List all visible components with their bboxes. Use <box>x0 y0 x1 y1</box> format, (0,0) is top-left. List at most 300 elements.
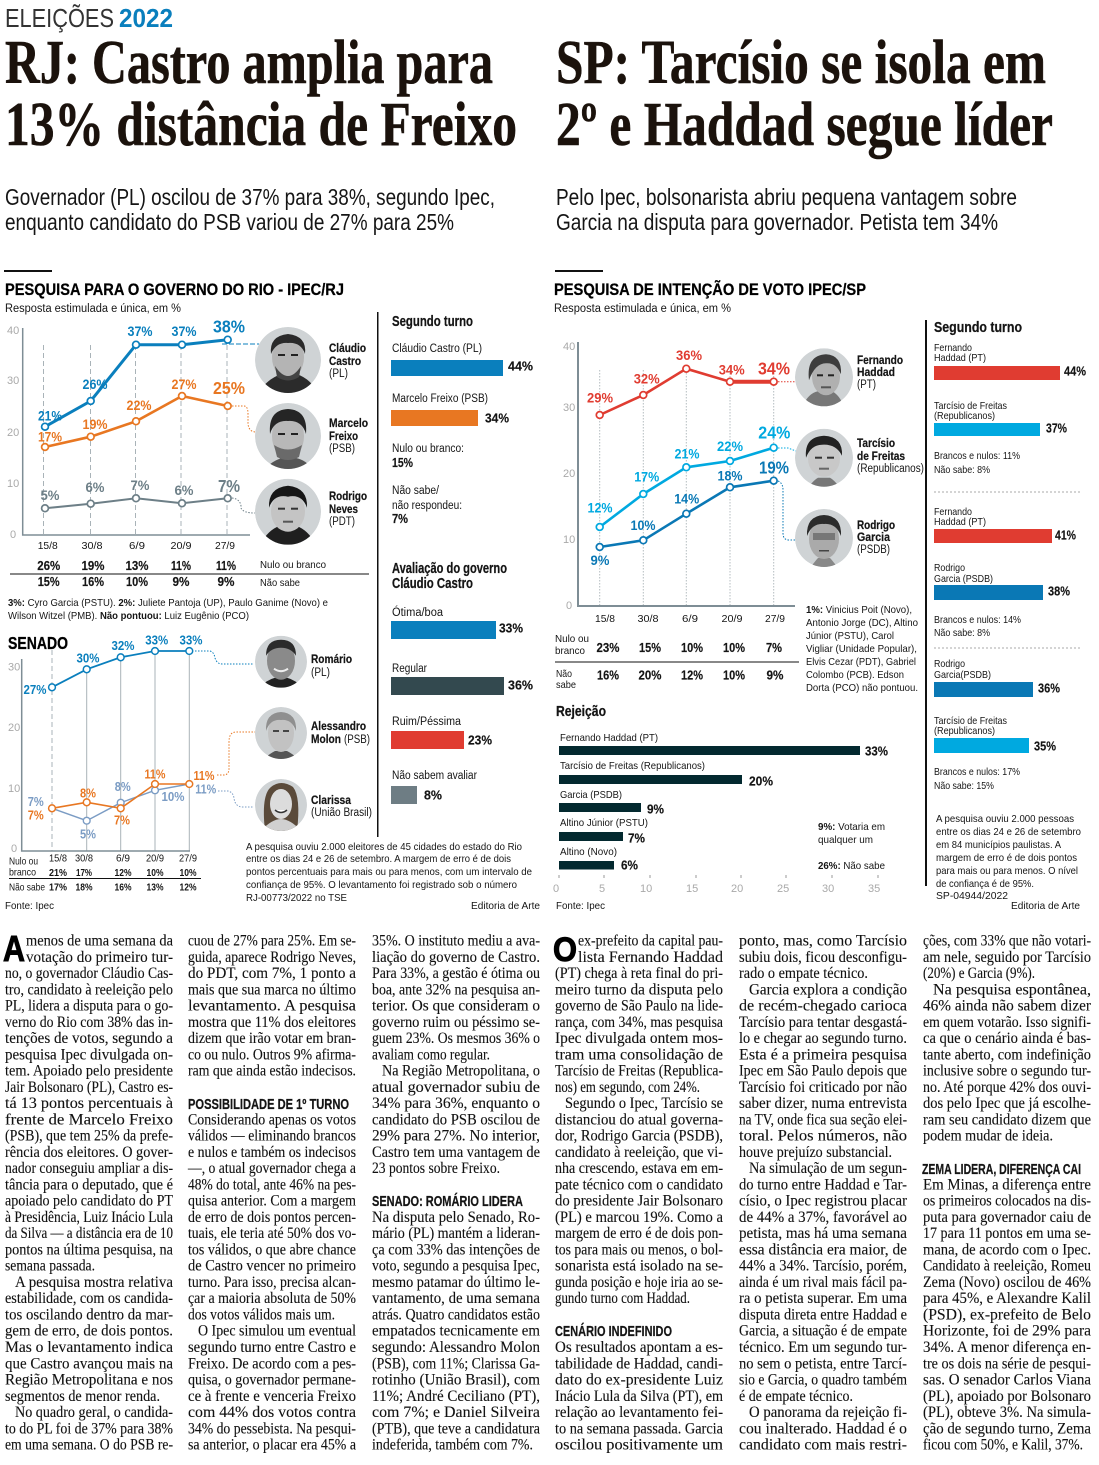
matchup: Garcia x Tarcísio: 36% <box>1038 682 1060 696</box>
x axis dates: 6/9 <box>129 540 145 552</box>
series: Clarissa <box>28 780 216 842</box>
article column 2: mais que sua marca no último <box>188 981 356 998</box>
article column 4: lista Fernando Haddad <box>578 949 723 966</box>
article column 3: 35%. O instituto mediu a ava- <box>372 932 540 950</box>
table: nulo e não sabe, Senado: 21% <box>49 867 68 879</box>
name: Cláudio Castro: Cláudio <box>329 343 366 355</box>
bar chart: rejeição: Altino (Novo) <box>560 846 617 858</box>
rejeição notes <box>818 821 885 872</box>
article column 1: gem de erro, de dois pontos. <box>5 1323 173 1340</box>
article column 4: ex-prefeito da capital pau- <box>578 932 723 950</box>
line chart: governo de SP <box>563 341 796 625</box>
article column 3: boa, ante 32% na pesquisa an- <box>372 981 540 998</box>
matchup: Haddad x Garcia: Haddad (PT) <box>934 516 986 528</box>
article column 4 <box>553 931 723 1454</box>
article column 3: candidato do PSB oscilou de <box>372 1111 540 1128</box>
article column 4: sonarista está isolado na se- <box>555 1258 723 1275</box>
article column 3: 29% para 27%. No interior, <box>372 1128 540 1145</box>
headline: Rio de Janeiro <box>5 29 517 159</box>
article column 5: ra o petista superar. Em uma <box>739 1290 907 1307</box>
article column 5: na TV, onde fica sua seção elei- <box>739 1111 907 1128</box>
article column 5: candidato com mais restri- <box>739 1437 907 1454</box>
article column 3: atrás. Quatro candidatos estão <box>372 1306 540 1324</box>
article column 2: çar a maioria absoluta de 50% <box>188 1290 356 1307</box>
article column 3: vantamento, de uma semana <box>372 1290 540 1307</box>
article column 5: é de empate técnico. <box>739 1388 853 1405</box>
article column 2: de erro de dois pontos percen- <box>188 1209 356 1226</box>
x axis dates: 27/9 <box>765 613 785 625</box>
axis labels: 35 <box>868 883 880 895</box>
table: nulo e não sabe, Senado: 6/9 <box>116 852 130 864</box>
section title: intenção de voto SP: Resposta estimulada e única, em % <box>554 303 731 315</box>
axis labels <box>553 883 880 895</box>
article column 5: essa distância era maior, de <box>739 1241 907 1258</box>
note: outros candidatos SP: Dorta (PCO) não pontuou. <box>806 682 918 694</box>
name: Marcelo Freixo <box>329 418 368 455</box>
x axis dates: 20/9 <box>722 613 743 625</box>
article column 4: pate técnico com o candidato <box>555 1176 723 1193</box>
name: Fernando Haddad: Fernando <box>857 355 903 367</box>
y axis labels <box>563 341 575 612</box>
article column 3: rotinho (União Brasil), com <box>372 1372 540 1388</box>
section title: intenção de voto SP <box>554 279 866 315</box>
series: Romário: 30% <box>76 652 100 666</box>
panel: avaliação do governo <box>391 561 533 804</box>
series: Clarissa: 5% <box>80 828 96 842</box>
methodology note: Rio: entre os dias 24 e 26 de setembro. A margem de erro é de dois <box>246 853 511 865</box>
series: Tarcísio <box>588 422 791 530</box>
bar chart: rejeição: 7% <box>628 832 645 846</box>
y axis labels: 30 <box>7 375 19 387</box>
article column 1: to do PL foi de 37% para 38% <box>5 1420 173 1437</box>
article column 2 <box>187 932 356 1454</box>
series: Haddad: 32% <box>634 370 660 386</box>
table: nulo e não sabe, SP: 12% <box>681 668 703 682</box>
x axis dates: 30/8 <box>82 540 103 552</box>
deck: São Paulo: Garcia na disputa para governador. Petista tem 34% <box>556 209 998 235</box>
table: nulo e não sabe, Senado: 17% <box>49 882 68 894</box>
name: Romário: (PL) <box>311 667 330 679</box>
portrait: Alessandro Molon <box>255 707 307 759</box>
article column 6: mana, de acordo com o Ipec. <box>923 1241 1091 1258</box>
article column 3: atual governador subiu de <box>372 1079 540 1096</box>
table: nulo e não sabe, SP: sabe <box>556 679 576 691</box>
article column 4: (PT) chega à reta final do pri- <box>555 965 723 982</box>
article column 4: nos) em segundo, com 24%. <box>555 1079 700 1096</box>
article column 6: para 45%, e Alexandre Kalil <box>923 1290 1091 1307</box>
methodology note: Rio: RJ-00773/2022 no TSE <box>246 892 347 904</box>
y axis labels: 30 <box>563 402 575 414</box>
subheading: cenário indefinido: CENÁRIO INDEFINIDO <box>555 1323 672 1340</box>
drop cap A: A <box>3 928 25 969</box>
x axis dates: 15/8 <box>38 540 58 552</box>
series: Molon: 8% <box>80 786 96 800</box>
y axis labels: 40 <box>563 341 575 353</box>
article column 1: votação do primeiro tur- <box>26 949 173 966</box>
name: Fernando Haddad: (PT) <box>857 379 876 391</box>
article column 5: petista, mas há uma semana <box>739 1225 907 1242</box>
article column 2: O Ipec simulou um eventual <box>198 1323 356 1340</box>
article column 6: dos pelo Ipec que já escolhe- <box>923 1095 1091 1112</box>
article column 2: levantamento. A pesquisa <box>188 998 356 1014</box>
article column 2: turno. Para isso, precisa alcan- <box>188 1274 356 1291</box>
name: Rodrigo Garcia: Garcia <box>857 532 891 544</box>
methodology note: SP: para mais ou para menos. O nível <box>936 865 1078 877</box>
matchup: Haddad x Garcia: Fernando <box>934 506 972 518</box>
series: Haddad: 34% <box>719 361 745 377</box>
table: nulo e não sabe, SP: 7% <box>766 641 782 655</box>
article column 3: (PTB), que teve a candidatura <box>372 1420 540 1437</box>
series: Freixo: 25% <box>213 378 245 398</box>
series: Castro: 38% <box>213 316 245 336</box>
article column 4: Inácio Lula da Silva (PT), em <box>555 1388 723 1405</box>
article column 5: Garcia explora a condição <box>749 981 907 998</box>
bar chart: rejeição: Garcia (PSDB) <box>560 789 622 801</box>
article column 6: (PSD), ex-prefeito de Belo <box>923 1306 1091 1324</box>
panel: segundo turno SP <box>934 320 1086 792</box>
article column 3: (PSB), com 11%; Clarissa Ga- <box>372 1355 540 1372</box>
article column 1: tância para o deputado, que é <box>5 1176 173 1193</box>
table: nulo e não sabe, Senado: 27/9 <box>179 852 197 864</box>
article column 2: —, o atual governador chega a <box>187 1160 356 1177</box>
article column 4: (PL) e marcou 19%. Como a <box>555 1209 723 1226</box>
article column 1: à Presidência, Luiz Inácio Lula <box>5 1209 173 1226</box>
article column 1: tenções de votos, segundo a <box>5 1030 173 1047</box>
article column 2: sa anterior, o placar era 45% a <box>188 1437 356 1454</box>
article column 6: 34%. A menor diferença en- <box>923 1339 1091 1356</box>
article column 6: sas. O senador Carlos Viana <box>923 1372 1091 1388</box>
line chart: governo do Rio <box>7 316 259 552</box>
article column 5: Na simulação de um segun- <box>749 1160 907 1177</box>
article column 6 <box>922 932 1092 1454</box>
note: outros candidatos SP: 1%: Vinicius Poit (Novo), <box>806 604 912 616</box>
methodology note: SP: margem de erro é de dois pontos <box>936 852 1077 864</box>
series: Romário: 33% <box>180 634 202 648</box>
article column 1: apoiado pelo candidato do PT <box>5 1193 173 1210</box>
article column 6: Em Minas, a diferença entre <box>923 1176 1091 1193</box>
section title: intenção de voto SP: PESQUISA DE INTENÇÃO DE VOTO IPEC/SP <box>554 279 866 299</box>
article column 2: ram que ainda estão indecisos. <box>188 1063 356 1080</box>
section label: Eleições 2022: ELEIÇÕES <box>5 3 114 33</box>
section title: governo do Rio <box>5 281 344 315</box>
series: Freixo: 22% <box>126 397 152 413</box>
table: nulo e não sabe, Senado: 12% <box>180 882 197 894</box>
matchup: Haddad x Garcia <box>934 506 1076 639</box>
axis labels: 5 <box>599 883 605 895</box>
article column 2: válidos — eliminando brancos <box>188 1128 356 1145</box>
name: Romário: Romário <box>311 654 352 666</box>
article column 6: Horizonte, foi de 29% para <box>923 1323 1091 1340</box>
article column 1: no, o governador Cláudio Cas- <box>5 965 173 982</box>
note: outros candidatos, Rio: 3%: Cyro Garcia (PSTU). 2%: Juliete Pantoja (UP), Paulo Ganime (Novo) e <box>8 597 328 609</box>
deck: São Paulo <box>556 184 1017 235</box>
matchup: Haddad x Tarcísio: (Republicanos) <box>934 410 995 422</box>
article column 6: (20%) e Garcia (9%). <box>923 965 1035 982</box>
table: nulo e não sabe, SP: 23% <box>596 641 620 655</box>
article column 6: Na pesquisa espontânea, <box>933 981 1091 998</box>
article column 3: Na Região Metropolitana, o <box>382 1063 540 1080</box>
note: outros candidatos SP: Antonio Jorge (DC), Altino <box>806 617 918 629</box>
article column 6: (PL), obteve 3%. Na simula- <box>923 1404 1091 1421</box>
article column 1: que Castro avançou mais na <box>5 1355 173 1372</box>
table: nulo e não sabe, SP: 16% <box>597 668 619 682</box>
panel: segundo turno Rio <box>391 314 533 526</box>
source: Ipec SP: Fonte: Ipec <box>556 900 605 912</box>
series: Tarcísio: 12% <box>588 499 613 515</box>
axis labels: 20 <box>731 883 743 895</box>
name: Rodrigo Neves <box>329 491 367 528</box>
series: Tarcísio: 24% <box>758 422 791 442</box>
table: nulo e não sabe, Senado: 18% <box>76 882 93 894</box>
note: outros candidatos SP: Colombo (PCB). Edson <box>806 669 904 681</box>
x axis dates <box>595 613 785 625</box>
article column 2: e nulos e também os indecisos <box>188 1144 356 1161</box>
series: Haddad: 36% <box>676 347 703 363</box>
table: nulo e não sabe, Senado: 10% <box>180 867 197 879</box>
article column 6: ção de segundo turno, Zema <box>923 1420 1091 1437</box>
article column 5: do turno entre Haddad e Tar- <box>739 1176 907 1193</box>
table: nulo e não sabe, Senado: 15/8 <box>49 852 67 864</box>
name: Tarcísio de Freitas: de Freitas <box>857 451 905 463</box>
series: Molon: 7% <box>114 814 130 828</box>
name: Alessandro Molon: Alessandro <box>311 721 366 733</box>
article column 4: meiro turno da disputa pelo <box>555 981 723 998</box>
article column 2: segundo turno entre Castro e <box>188 1339 356 1356</box>
panel: segundo turno Rio: Não sabe/ <box>392 485 440 497</box>
series: Clarissa: 8% <box>115 780 131 794</box>
article column 4: distanciou do atual governa- <box>555 1111 723 1128</box>
article column 4: Ipec divulgada ontem mos- <box>555 1030 723 1047</box>
article column 3: empatados tecnicamente em <box>372 1323 540 1340</box>
table: nulo e não sabe, Rio <box>10 559 369 589</box>
matchup: Garcia x Tarcísio: Não sabe: 15% <box>934 780 994 792</box>
x axis dates: 6/9 <box>682 613 698 625</box>
article column 3: governo ruim ou péssimo se- <box>372 1014 540 1031</box>
table: nulo e não sabe, Senado: 12% <box>114 867 132 879</box>
table: nulo e não sabe, SP: 15% <box>639 641 661 655</box>
note: outros candidatos SP: Elvis Cezar (PDT), Gabriel <box>806 656 916 668</box>
article column 5: lo e chegar ao segundo turno. <box>739 1030 907 1047</box>
bar chart: rejeição <box>553 704 888 895</box>
article column 3: Para 33%, a gestão é ótima ou <box>372 965 540 982</box>
article column 2: tos válidos, o que abre chance <box>188 1241 356 1258</box>
methodology note: SP: A pesquisa ouviu 2.000 pessoas <box>936 813 1074 825</box>
bar chart: rejeição: 6% <box>621 858 638 872</box>
article column 4: oscilou positivamente um <box>555 1437 723 1454</box>
article column 4: candidato à reeleição, que vi- <box>555 1144 723 1161</box>
table: nulo e não sabe, Rio: 11% <box>171 559 191 573</box>
article column 1: pontos na última pesquisa, na <box>5 1241 173 1258</box>
series: Garcia: 14% <box>674 490 700 506</box>
article column 1: rência dos eleitores. O gover- <box>5 1144 173 1161</box>
name: Fernando Haddad <box>857 355 903 391</box>
table: nulo e não sabe, SP: branco <box>555 645 585 657</box>
table: nulo e não sabe, SP <box>555 633 799 691</box>
series: Clarissa: 7% <box>28 795 44 809</box>
name: Rodrigo Garcia <box>857 520 895 556</box>
table: nulo e não sabe, SP: 10% <box>723 668 745 682</box>
article column 4: relação ao levantamento fei- <box>555 1404 723 1421</box>
matchup: Haddad x Garcia: Brancos e nulos: 14% <box>934 614 1021 626</box>
article column 4: dor, Rodrigo Garcia (PSDB), <box>555 1128 723 1145</box>
article column 4: gunda posição e hoje iria ao se- <box>555 1274 723 1291</box>
source: Ipec Rio: Fonte: Ipec <box>5 900 54 912</box>
article column 5 <box>739 932 908 1454</box>
article column 2: tuais, ele teria até 50% dos vo- <box>188 1225 356 1242</box>
matchup: Haddad x Tarcísio: 37% <box>1046 422 1067 436</box>
article column 3: Na disputa pelo Senado, Ro- <box>372 1209 540 1226</box>
article column 1: frente de Marcelo Freixo <box>5 1111 173 1128</box>
article column 1: em uma semana. O do PSB re- <box>5 1437 173 1454</box>
portrait: Romário <box>255 636 307 688</box>
series: Neves: 6% <box>86 479 105 495</box>
article column 1: tos oscilando dentro da mar- <box>5 1306 173 1324</box>
name: Romário <box>311 654 352 679</box>
matchup: Haddad x Garcia: Rodrigo <box>934 562 965 574</box>
article column 5: císio, o Ipec registrou placar <box>739 1193 908 1210</box>
matchup: Haddad x Tarcísio: Tarcísio de Freitas <box>934 400 1007 412</box>
y axis labels: 20 <box>7 427 19 439</box>
series: Tarcísio: 21% <box>674 445 700 461</box>
headline: Rio de Janeiro: 13% distância de Freixo <box>5 91 517 159</box>
methodology note: SP <box>936 813 1081 902</box>
name: Marcelo Freixo: Freixo <box>329 431 358 443</box>
series: Neves <box>40 476 240 512</box>
table: nulo e não sabe, SP: 10% <box>723 641 745 655</box>
table: nulo e não sabe, Rio: 16% <box>82 575 104 589</box>
headline: São Paulo <box>556 29 1053 159</box>
series: Freixo: 19% <box>82 416 108 432</box>
series: Haddad: 34% <box>758 358 790 378</box>
article column 5: saber dizer, numa entrevista <box>739 1095 907 1112</box>
article column 2: 34% do pessebista. Na pesqui- <box>188 1420 356 1437</box>
name: Rodrigo Neves: (PDT) <box>329 516 355 528</box>
portrait: Rodrigo Garcia <box>795 509 853 568</box>
y axis labels: 30 <box>8 662 20 674</box>
article column 1: PL, lidera a disputa para o go- <box>5 998 173 1014</box>
panel: segundo turno SP: Segundo turno <box>934 320 1022 336</box>
article column 3: avaliam como regular. <box>372 1046 490 1063</box>
panel: avaliação do governo: 23% <box>468 734 492 748</box>
article column 2: dizem que irão votar em bran- <box>188 1030 356 1047</box>
x axis dates <box>38 540 235 552</box>
article column 1: Jair Bolsonaro (PL), Castro es- <box>5 1079 173 1096</box>
article column 1: estabilidade, com os candida- <box>5 1290 173 1307</box>
section title: governo do Rio: PESQUISA PARA O GOVERNO DO RIO - IPEC/RJ <box>5 281 344 299</box>
y axis labels: 10 <box>563 534 575 546</box>
name: Rodrigo Garcia: Rodrigo <box>857 520 895 532</box>
article column 4: do presidente Jair Bolsonaro <box>555 1193 723 1210</box>
table: nulo e não sabe, Rio: Não sabe <box>260 577 300 589</box>
name: Cláudio Castro: (PL) <box>329 368 348 380</box>
matchup: Haddad x Tarcísio: Não sabe: 8% <box>934 464 990 476</box>
panel: avaliação do governo: 36% <box>508 678 533 692</box>
article column 3: mesmo patamar do último le- <box>372 1274 540 1291</box>
title: Senado: SENADO <box>8 633 68 653</box>
panel: avaliação do governo: Ótima/boa <box>392 606 444 619</box>
article column 5: disputa direta entre Haddad e <box>739 1306 907 1324</box>
series: Neves: 5% <box>40 487 60 503</box>
article column 3: guem 23%. Os mesmos 36% o <box>372 1030 540 1047</box>
name: Rodrigo Garcia: (PSDB) <box>857 544 890 556</box>
series: Castro: 26% <box>82 376 108 392</box>
name: Marcelo Freixo: (PSB) <box>329 443 355 455</box>
article column 1: semana passada. <box>5 1258 95 1275</box>
y axis labels: 0 <box>566 600 572 612</box>
matchup: Haddad x Garcia: 38% <box>1048 584 1070 598</box>
rejeição notes: 26%: Não sabe <box>818 860 885 872</box>
panel: segundo turno Rio: 44% <box>508 360 533 374</box>
matchup: Garcia x Tarcísio: 35% <box>1034 740 1056 754</box>
name: Alessandro Molon <box>311 721 370 746</box>
portrait: Marcelo Freixo <box>255 403 321 469</box>
article column 6: 46% ainda não sabem dizer <box>923 998 1092 1014</box>
article column 1: (PSB), que tem 25% da prefe- <box>5 1128 173 1145</box>
axis labels: 10 <box>640 883 652 895</box>
article column 2: dos votos válidos mais um. <box>188 1306 335 1324</box>
article column 5: no sem o petista, entre Tarcí- <box>739 1355 907 1372</box>
panel: segundo turno Rio: Marcelo Freixo (PSB) <box>392 393 488 405</box>
panel: segundo turno Rio: Nulo ou branco: <box>392 443 464 455</box>
note: outros candidatos, Rio <box>8 597 328 622</box>
credit: Editoria de Arte Rio: Editoria de Arte <box>471 900 540 912</box>
matchup: Garcia x Tarcísio: (Republicanos) <box>934 725 995 737</box>
article column 5: Garcia, a situação é de empate <box>739 1323 907 1340</box>
methodology note: SP: de confiança é de 95%. <box>936 878 1034 890</box>
series: Freixo: 27% <box>172 376 197 392</box>
line chart: Senado <box>8 634 255 894</box>
series: Romário: 33% <box>145 634 168 648</box>
article column 3: liação do governo de Castro. <box>372 949 540 966</box>
article column 2: cuou de 27% para 25%. Em se- <box>188 932 356 950</box>
article column 4: governo de São Paulo na lide- <box>555 998 723 1014</box>
series: Clarissa: 11% <box>195 782 216 796</box>
matchup: Haddad x Tarcísio: Brancos e nulos: 11% <box>934 450 1020 462</box>
panel: avaliação do governo: Avaliação do governo <box>392 561 507 577</box>
article column 3: com 7%; e Daniel Silveira <box>372 1404 540 1421</box>
article column 1: No quadro geral, o candida- <box>15 1404 173 1421</box>
panel: avaliação do governo: Cláudio Castro <box>392 576 473 592</box>
article column 2: Freixo. De acordo com a pes- <box>188 1355 356 1372</box>
article column 1: Mas o levantamento indica <box>5 1339 173 1356</box>
bar chart: rejeição: 20% <box>749 774 773 788</box>
article column 2: ce à frente e venceria Freixo <box>188 1388 356 1405</box>
headline: Rio de Janeiro: RJ: Castro amplia para <box>5 29 493 97</box>
table: nulo e não sabe, Senado: 20/9 <box>146 852 164 864</box>
matchup: Haddad x Tarcísio: Haddad (PT) <box>934 352 986 364</box>
series: Haddad <box>587 347 790 418</box>
x axis dates: 15/8 <box>595 613 615 625</box>
table: nulo e não sabe, SP: Não <box>556 668 572 680</box>
deck: Rio de Janeiro: Governador (PL) oscilou de 37% para 38%, segundo Ipec, <box>5 184 495 210</box>
bar chart: rejeição: Rejeição <box>556 704 606 720</box>
x axis dates: 30/8 <box>638 613 659 625</box>
table: nulo e não sabe, Senado: 30/8 <box>75 852 93 864</box>
article column 3: ça com 33% das intenções de <box>372 1241 540 1258</box>
methodology note: SP: em 84 municípios paulistas. A <box>936 839 1061 851</box>
article column 5: técnico. Em um segundo tur- <box>739 1339 907 1356</box>
table: nulo e não sabe, Senado: 17% <box>76 867 93 879</box>
name: Tarcísio de Freitas: Tarcísio <box>857 438 895 450</box>
article column 1: verno do Rio com 38% das in- <box>5 1014 173 1031</box>
y axis labels <box>8 662 20 855</box>
article column 2: Considerando apenas os votos <box>188 1111 356 1128</box>
name: Clarissa: (União Brasil) <box>311 807 372 819</box>
matchup: Haddad x Garcia: Garcia (PSDB) <box>934 573 993 585</box>
bar chart: rejeição: Altino Júnior (PSTU) <box>560 817 648 829</box>
axis labels: 0 <box>553 883 559 895</box>
table: nulo e não sabe, Rio: 11% <box>216 559 236 573</box>
